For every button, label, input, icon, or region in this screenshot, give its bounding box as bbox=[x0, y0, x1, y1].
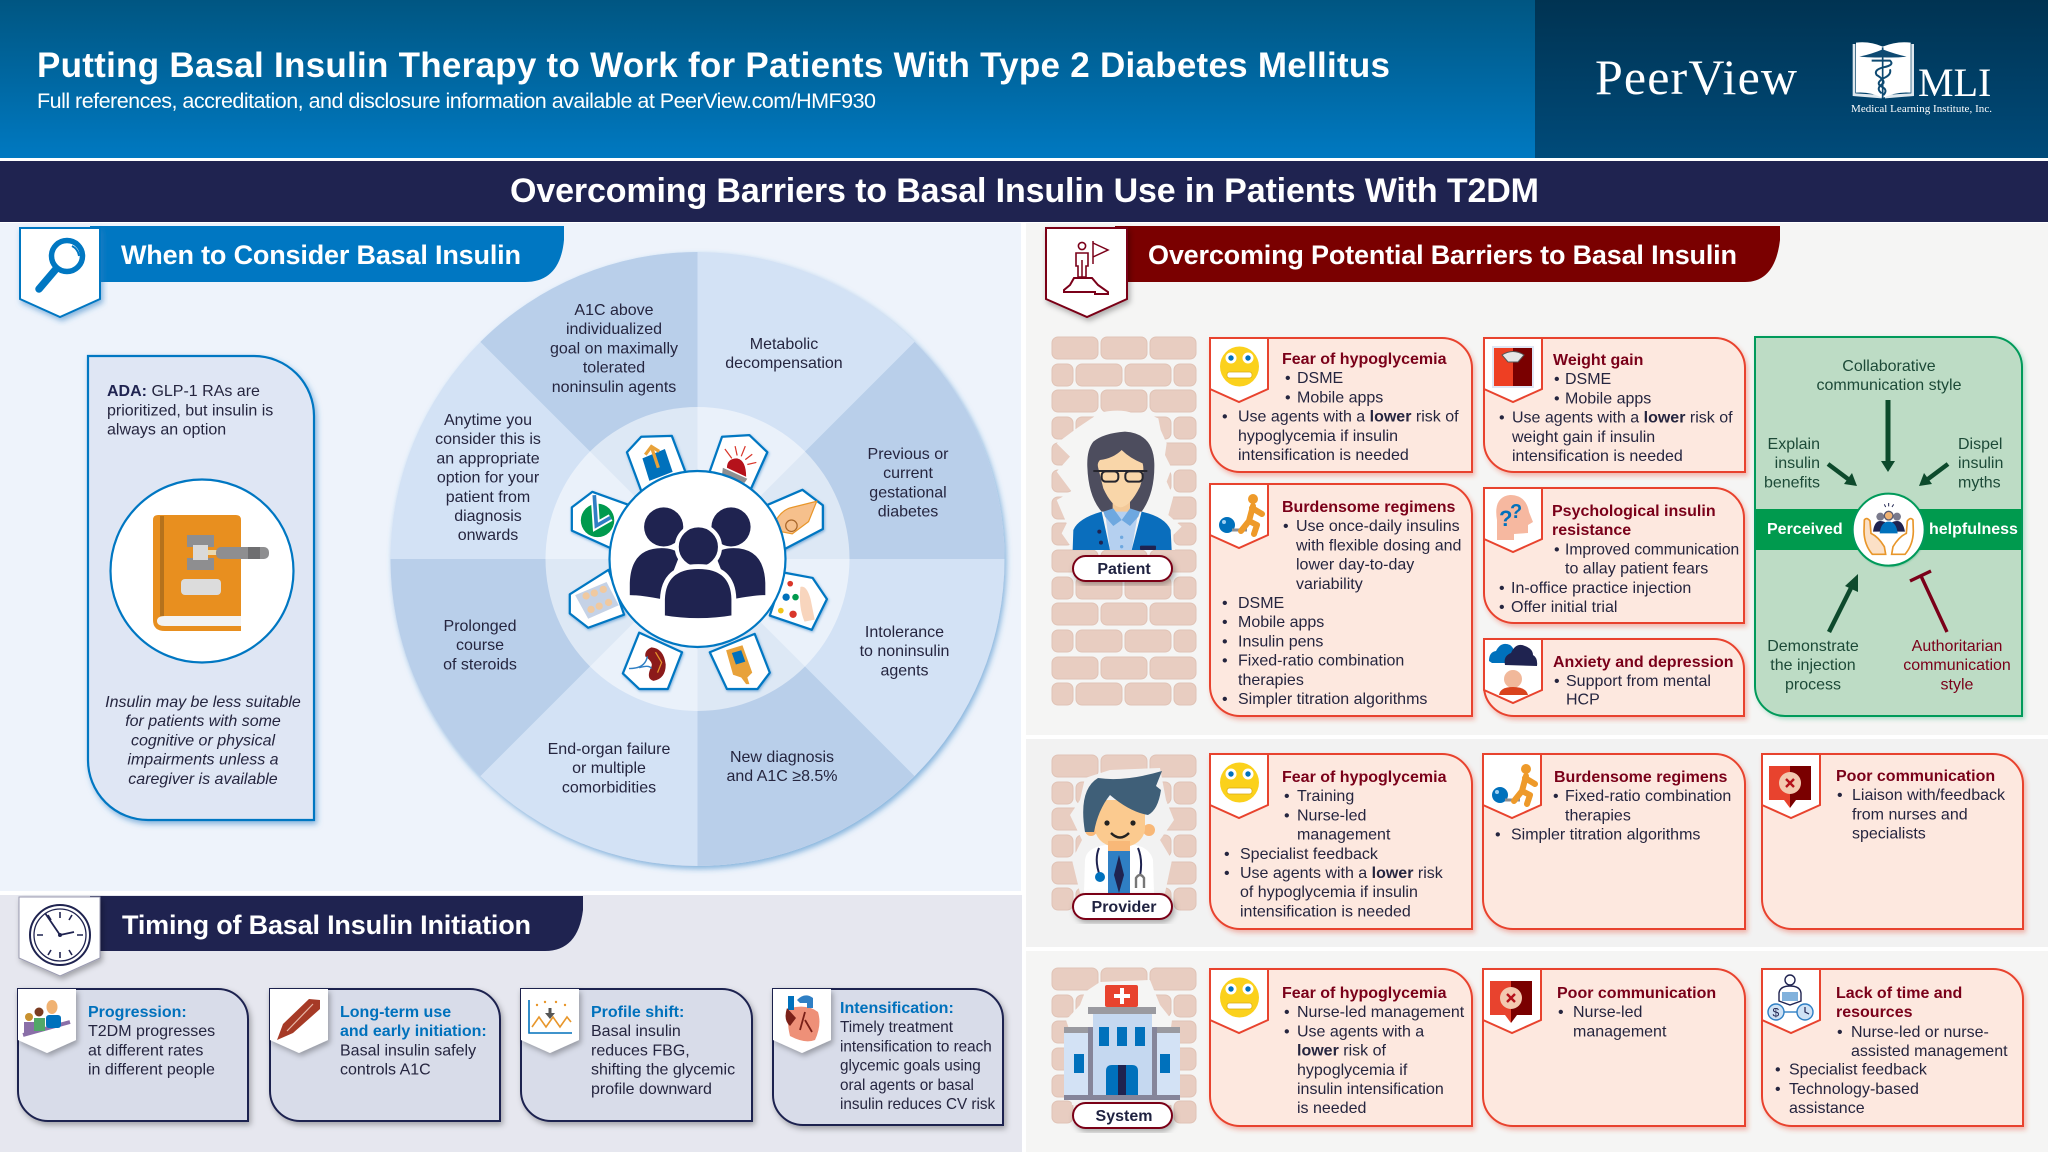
progression text: Progression: bbox=[88, 1004, 187, 1021]
icon: summit flag shield bbox=[1046, 228, 1127, 317]
card text: • bbox=[1554, 673, 1560, 690]
card text: resources bbox=[1836, 1004, 1913, 1021]
icon: fingerstick hand bbox=[775, 501, 817, 534]
card text: of hypoglycemia if insulin bbox=[1240, 884, 1418, 901]
card text: Psychological insulin bbox=[1552, 503, 1716, 520]
icon: questioning head: ? bbox=[1510, 501, 1522, 523]
demonstrate label: Demonstrate bbox=[1767, 638, 1859, 655]
dispel label: insulin bbox=[1958, 455, 2003, 472]
card text: management bbox=[1573, 1023, 1667, 1040]
card text: with flexible dosing and bbox=[1295, 537, 1461, 554]
progression text: T2DM progresses bbox=[88, 1023, 215, 1040]
green panel: perceived helpfulness bbox=[1755, 337, 2022, 716]
barrier card: anxiety and depression bbox=[1484, 639, 1744, 716]
icon: patient group hub bbox=[610, 471, 786, 647]
card text: Use once-daily insulins bbox=[1296, 518, 1460, 535]
wheel labels: of steroids bbox=[443, 656, 517, 673]
card text: • bbox=[1224, 846, 1230, 863]
logo: MLI: Medical Learning Institute, Inc. bbox=[1851, 103, 1992, 115]
arrow: explain bbox=[1828, 464, 1857, 486]
icon: cloud over head bbox=[1484, 639, 1542, 703]
icon: clock shield bbox=[19, 897, 100, 976]
icon: runner with ball bbox=[1483, 754, 1541, 818]
card text: • bbox=[1284, 807, 1290, 824]
demonstrate label: the injection bbox=[1770, 657, 1856, 674]
heading ribbon bbox=[1115, 226, 1780, 282]
card text: Anxiety and depression bbox=[1553, 654, 1734, 671]
explain label: Explain bbox=[1768, 436, 1820, 453]
card text: • bbox=[1224, 865, 1230, 882]
wheel labels: agents bbox=[880, 662, 929, 679]
card text: intensification is needed bbox=[1240, 903, 1411, 920]
icon: magnifier shield bbox=[20, 228, 100, 317]
wheel icon tabs bbox=[570, 435, 827, 689]
card text: Burdensome regimens bbox=[1554, 769, 1727, 786]
wheel labels: noninsulin agents bbox=[552, 379, 676, 396]
wheel labels: Metabolic bbox=[750, 336, 818, 353]
barrier card: burdensome regimens (patient) bbox=[1210, 484, 1472, 716]
card text: • bbox=[1222, 633, 1228, 650]
intensification text: glycemic goals using bbox=[840, 1058, 981, 1075]
suitability note: impairments unless a bbox=[127, 752, 279, 769]
card text: Insulin pens bbox=[1238, 633, 1323, 650]
wheel labels: course bbox=[456, 637, 504, 654]
card text: • bbox=[1554, 541, 1560, 558]
arrow: collaborative bbox=[1881, 400, 1895, 472]
progression text: in different people bbox=[88, 1062, 215, 1079]
card text: Mobile apps bbox=[1238, 614, 1324, 631]
collaborative label: communication style bbox=[1817, 377, 1962, 394]
icon: green timer bbox=[581, 495, 614, 537]
icon: time and money: $ bbox=[1772, 1006, 1780, 1020]
wheel labels: Prolonged bbox=[444, 618, 516, 635]
wheel labels bbox=[435, 302, 949, 796]
long-term use text: Basal insulin safely bbox=[340, 1042, 476, 1059]
logo: MLI: MLI bbox=[1918, 60, 1991, 105]
card text: • bbox=[1775, 1062, 1781, 1079]
card text: assisted management bbox=[1851, 1043, 2008, 1060]
icon: insulin pen bbox=[270, 989, 328, 1053]
panel: timing of basal insulin initiation bbox=[18, 896, 1003, 1125]
card text: HCP bbox=[1566, 692, 1600, 709]
icon: questioning head: ? bbox=[1499, 506, 1512, 531]
card text: Support from mental bbox=[1566, 673, 1711, 690]
icon: speech bubble cross bbox=[1762, 754, 1820, 818]
label: system: System bbox=[1096, 1108, 1152, 1125]
label: system bbox=[1073, 1103, 1172, 1128]
label: provider: Provider bbox=[1092, 899, 1156, 916]
navy subheader band bbox=[0, 161, 2048, 222]
authoritarian label: communication bbox=[1903, 657, 2011, 674]
card text: • bbox=[1284, 1004, 1290, 1021]
card text: Nurse-led bbox=[1297, 807, 1366, 824]
icon: hospital bbox=[1064, 985, 1180, 1100]
barrier card: lack of time and resources bbox=[1762, 969, 2023, 1126]
card text: from nurses and bbox=[1852, 806, 1968, 823]
heading ribbon bbox=[90, 896, 583, 951]
wheel labels: or multiple bbox=[572, 760, 646, 777]
icon: kidney bbox=[629, 647, 666, 681]
card text: • bbox=[1283, 518, 1289, 535]
card text: Nurse-led bbox=[1573, 1004, 1642, 1021]
card text: DSME bbox=[1238, 595, 1284, 612]
barrier card: weight gain bbox=[1484, 338, 1745, 472]
long-term use text: and early initiation: bbox=[340, 1023, 487, 1040]
wheel labels: consider this is bbox=[435, 431, 541, 448]
card text: • bbox=[1499, 599, 1505, 616]
card text: hypoglycemia if insulin bbox=[1238, 428, 1398, 445]
label: provider bbox=[1073, 894, 1172, 919]
icon: runner with ball bbox=[1210, 484, 1268, 548]
card text: therapies bbox=[1238, 672, 1304, 689]
card text: Poor communication bbox=[1557, 985, 1716, 1002]
wheel labels: gestational bbox=[869, 484, 947, 501]
icon: glucose meter bbox=[726, 645, 752, 684]
arrow: dispel bbox=[1919, 464, 1948, 486]
heading: Overcoming Potential Barriers to Basal Insulin bbox=[1148, 240, 1737, 270]
profile shift text: reduces FBG, bbox=[591, 1042, 690, 1059]
card text: • bbox=[1554, 390, 1560, 407]
logo: MLI bbox=[1851, 42, 1992, 115]
icon: questioning head bbox=[1484, 488, 1542, 552]
intensification text: Timely treatment bbox=[840, 1019, 954, 1036]
icon: weighing scale bbox=[1484, 338, 1542, 402]
card text: Fear of hypoglycemia bbox=[1282, 769, 1447, 786]
heading ribbon bbox=[90, 226, 564, 282]
card text: variability bbox=[1296, 576, 1363, 593]
wheel labels: New diagnosis bbox=[730, 749, 834, 766]
card text: • bbox=[1222, 595, 1228, 612]
wheel labels: to noninsulin bbox=[860, 643, 949, 660]
card text: DSME bbox=[1565, 371, 1611, 388]
label: patient: Patient bbox=[1097, 561, 1151, 578]
demonstrate label: process bbox=[1785, 676, 1841, 693]
card text: Specialist feedback bbox=[1789, 1062, 1928, 1079]
card text: In-office practice injection bbox=[1511, 580, 1691, 597]
title: Putting Basal Insulin Therapy to Work for Patients With Type 2 Diabetes Mellitus bbox=[37, 46, 1390, 85]
icon: patient bbox=[1073, 432, 1172, 550]
timing card: progression bbox=[18, 989, 248, 1121]
wheel labels: Anytime you bbox=[444, 412, 532, 429]
card text: assistance bbox=[1789, 1100, 1865, 1117]
card text: DSME bbox=[1297, 370, 1343, 387]
green panel: perceived helpfulness: helpfulness bbox=[1929, 521, 2018, 538]
barrier card: fear of hypoglycemia (system) bbox=[1210, 969, 1472, 1126]
card text: • bbox=[1775, 1081, 1781, 1098]
card text: • bbox=[1499, 410, 1505, 427]
header banner bbox=[0, 0, 2048, 158]
helpfulness band bbox=[1756, 509, 2021, 550]
card text: lower risk bbox=[1372, 865, 1443, 882]
subheader title: Overcoming Barriers to Basal Insulin Use in Patients With T2DM bbox=[510, 172, 1539, 210]
card text: Weight gain bbox=[1553, 352, 1643, 369]
band labels: Perceived bbox=[1767, 521, 1843, 538]
card text: • bbox=[1558, 1004, 1564, 1021]
intensification text: intensification to reach bbox=[840, 1038, 992, 1055]
card text: hypoglycemia if bbox=[1297, 1062, 1408, 1079]
intensification text: oral agents or basal bbox=[840, 1077, 974, 1094]
card text: therapies bbox=[1565, 807, 1631, 824]
icon: rising A1C box bbox=[642, 447, 673, 481]
wheel labels: diabetes bbox=[878, 504, 938, 521]
card text: Use agents with a bbox=[1240, 865, 1372, 882]
heading: Timing of Basal Insulin Initiation bbox=[122, 910, 531, 940]
panel: overcoming potential barriers heading bbox=[1046, 226, 1780, 317]
logo: PeerView: PeerView bbox=[1595, 49, 1797, 105]
card text: intensification is needed bbox=[1238, 447, 1409, 464]
icon: progression people bbox=[18, 989, 76, 1053]
card text: insulin intensification bbox=[1297, 1081, 1444, 1098]
barrier card: fear of hypoglycemia (patient) bbox=[1210, 338, 1472, 472]
icon: pill pack bbox=[575, 582, 619, 619]
inhibitor: authoritarian bbox=[1910, 571, 1947, 632]
card text: Simpler titration algorithms bbox=[1511, 827, 1700, 844]
wheel labels: decompensation bbox=[725, 355, 843, 372]
wheel labels: A1C above bbox=[574, 302, 654, 319]
suitability note: Insulin may be less suitable bbox=[105, 694, 301, 711]
card text: Use agents with a bbox=[1238, 409, 1370, 426]
suitability note: for patients with some bbox=[125, 713, 281, 730]
ADA text: ADA: GLP-1 RAs are bbox=[107, 383, 260, 400]
intensification text: Intensification: bbox=[840, 1000, 954, 1017]
icon: provider bbox=[1083, 771, 1162, 893]
panel: when to consider basal insulin bbox=[18, 226, 2023, 1128]
explain label: insulin bbox=[1775, 455, 1820, 472]
barrier card: burdensome regimens (provider) bbox=[1483, 754, 1745, 929]
barrier card: fear of hypoglycemia (provider) bbox=[1210, 754, 1472, 929]
ADA callout card bbox=[88, 356, 314, 820]
profile shift text: profile downward bbox=[591, 1081, 712, 1098]
card text: weight gain if insulin bbox=[1511, 429, 1655, 446]
card text: Improved communication bbox=[1565, 541, 1739, 558]
card text: • bbox=[1222, 653, 1228, 670]
wheel labels: Intolerance bbox=[865, 624, 944, 641]
authoritarian label: style bbox=[1941, 676, 1974, 693]
wheel labels: tolerated bbox=[583, 360, 645, 377]
card text: • bbox=[1222, 614, 1228, 631]
collaborative label: Collaborative bbox=[1842, 358, 1936, 375]
barrier card: poor communication (provider) bbox=[1762, 754, 2023, 929]
card text: risk of bbox=[1339, 1043, 1386, 1060]
card text: lower risk of bbox=[1370, 409, 1459, 426]
card text: Nurse-led management bbox=[1297, 1004, 1465, 1021]
icon: speech bubble cross bbox=[1483, 969, 1541, 1033]
card text: • bbox=[1285, 389, 1291, 406]
card text: • bbox=[1553, 788, 1559, 805]
long-term use text: controls A1C bbox=[340, 1062, 431, 1079]
card text: Poor communication bbox=[1836, 768, 1995, 785]
card text: Mobile apps bbox=[1297, 389, 1383, 406]
provider wall bbox=[1052, 755, 1196, 910]
card text: resistance bbox=[1552, 522, 1631, 539]
wheel labels: patient from bbox=[446, 489, 530, 506]
card text: • bbox=[1837, 787, 1843, 804]
dispel label: myths bbox=[1958, 474, 2001, 491]
icon: pills and hand bbox=[778, 581, 815, 622]
explain label: benefits bbox=[1764, 474, 1820, 491]
card text: Fear of hypoglycemia bbox=[1282, 985, 1447, 1002]
card text: lower day-to-day bbox=[1296, 557, 1414, 574]
wheel labels: comorbidities bbox=[562, 779, 656, 796]
card text: Offer initial trial bbox=[1511, 599, 1617, 616]
card text: lower bbox=[1297, 1043, 1339, 1060]
icon: guideline book and gavel bbox=[110, 480, 294, 662]
card text: is needed bbox=[1297, 1100, 1366, 1117]
card text: • bbox=[1222, 691, 1228, 708]
card text: • bbox=[1284, 1023, 1290, 1040]
wheel labels: current bbox=[883, 465, 933, 482]
card text: Fixed-ratio combination bbox=[1238, 653, 1404, 670]
timing card: long-term use bbox=[270, 989, 500, 1121]
ADA text: always an option bbox=[107, 422, 226, 439]
card text: Nurse-led or nurse- bbox=[1851, 1024, 1989, 1041]
card text: Fear of hypoglycemia bbox=[1282, 351, 1447, 368]
card text: Liaison with/feedback bbox=[1852, 787, 2006, 804]
icon: caring hands bbox=[1853, 494, 1925, 566]
wheel labels: End-organ failure bbox=[548, 741, 670, 758]
wheel tab icons bbox=[575, 446, 817, 684]
profile shift text: Profile shift: bbox=[591, 1004, 684, 1021]
wheel labels: option for your bbox=[437, 470, 540, 487]
card text: management bbox=[1297, 827, 1391, 844]
dispel label: Dispel bbox=[1958, 436, 2002, 453]
icon: heart bbox=[773, 989, 831, 1053]
wheel labels: goal on maximally bbox=[550, 340, 678, 357]
card text: Mobile apps bbox=[1565, 390, 1651, 407]
barrier card: poor communication (system) bbox=[1483, 969, 1745, 1126]
suitability note: caregiver is available bbox=[128, 771, 278, 788]
wheel labels: diagnosis bbox=[454, 508, 522, 525]
timing card: profile shift bbox=[521, 989, 752, 1121]
card text: Use agents with a bbox=[1297, 1023, 1424, 1040]
profile shift text: shifting the glycemic bbox=[591, 1062, 735, 1079]
card text: specialists bbox=[1852, 826, 1926, 843]
card text: Technology-based bbox=[1789, 1081, 1919, 1098]
heading: When to Consider Basal Insulin bbox=[121, 240, 521, 270]
subtitle: Full references, accreditation, and disclosure information available at PeerView.com/HMF930 bbox=[37, 89, 876, 113]
system wall bbox=[1052, 968, 1196, 1123]
suitability note: cognitive or physical bbox=[131, 732, 275, 749]
timing card: intensification bbox=[773, 989, 1003, 1125]
intensification text: insulin reduces CV risk bbox=[840, 1096, 995, 1113]
icon: worried face bbox=[1210, 754, 1268, 818]
card text: • bbox=[1222, 409, 1228, 426]
icon: alarm bbox=[722, 446, 756, 483]
label: patient bbox=[1073, 556, 1172, 581]
card text: • bbox=[1837, 1024, 1843, 1041]
barrier card: psychological insulin resistance bbox=[1484, 488, 1744, 623]
wheel labels: Previous or bbox=[868, 446, 948, 463]
wheel: indications for basal insulin bbox=[390, 252, 1004, 866]
card text: Lack of time and bbox=[1836, 985, 1962, 1002]
profile shift text: Basal insulin bbox=[591, 1023, 681, 1040]
wheel labels: and A1C ≥8.5% bbox=[726, 768, 838, 785]
long-term use text: Long-term use bbox=[340, 1004, 451, 1021]
ADA text: prioritized, but insulin is bbox=[107, 402, 273, 419]
card text: to allay patient fears bbox=[1565, 561, 1708, 578]
card text: • bbox=[1495, 827, 1501, 844]
progression text: at different rates bbox=[88, 1042, 203, 1059]
card text: Training bbox=[1297, 788, 1354, 805]
wheel labels: individualized bbox=[566, 321, 662, 338]
card text: Fixed-ratio combination bbox=[1565, 788, 1731, 805]
card text: • bbox=[1285, 370, 1291, 387]
card text: Specialist feedback bbox=[1240, 846, 1379, 863]
card text: Simpler titration algorithms bbox=[1238, 691, 1427, 708]
card text: • bbox=[1284, 788, 1290, 805]
card text: • bbox=[1554, 371, 1560, 388]
icon: worried face bbox=[1210, 338, 1268, 402]
card text: Use agents with a bbox=[1512, 410, 1644, 427]
patient wall bbox=[1052, 337, 1196, 705]
icon: time and money bbox=[1762, 969, 1820, 1033]
card text: • bbox=[1499, 580, 1505, 597]
arrow: demonstrate bbox=[1829, 574, 1858, 632]
authoritarian label: Authoritarian bbox=[1912, 638, 2002, 655]
card text: intensification is needed bbox=[1512, 448, 1683, 465]
wheel labels: onwards bbox=[458, 527, 518, 544]
wheel labels: an appropriate bbox=[436, 450, 540, 467]
icon: glycemic profile bbox=[521, 989, 579, 1053]
icon: worried face bbox=[1210, 969, 1268, 1033]
card text: Burdensome regimens bbox=[1282, 499, 1455, 516]
card text: lower risk of bbox=[1644, 410, 1733, 427]
